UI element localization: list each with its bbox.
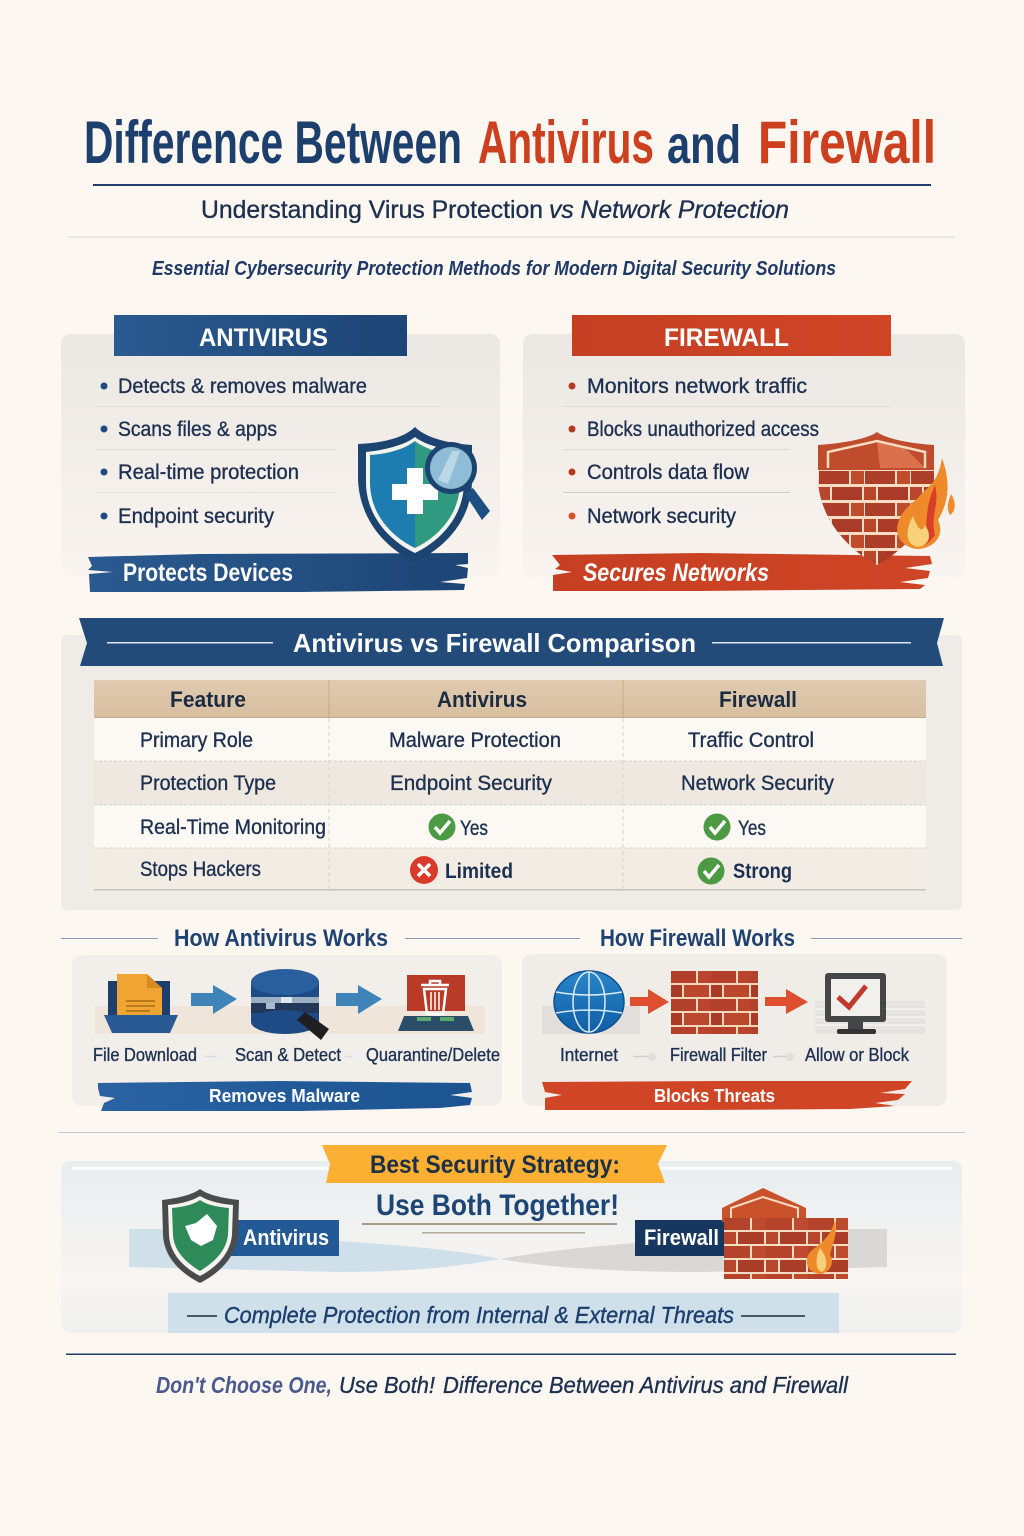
icon: internet globe: [554, 971, 624, 1033]
row: stops hackers: Stops Hackers: [140, 858, 261, 881]
subtitle: [201, 196, 789, 224]
arrow: [336, 985, 382, 1014]
subtitle: Understanding Virus Protection: [201, 196, 543, 224]
firewall feature list: Blocks unauthorized access: [587, 418, 819, 441]
antivirus feature list: [100, 375, 367, 528]
row: primary role: Traffic Control: [688, 729, 814, 752]
yellow ribbon: [322, 1145, 667, 1183]
subtitle: vs Network Protection: [549, 196, 789, 224]
icon: brick wall: [671, 971, 758, 1034]
callout: complete protection: Complete Protection from Internal & External Threats: [224, 1302, 734, 1328]
firewall header: [572, 315, 891, 356]
row: protection type: Protection Type: [140, 772, 276, 795]
row: protection type: [140, 772, 834, 795]
ribbon: protects devices: Protects Devices: [123, 559, 293, 587]
table header row: Firewall: [719, 687, 797, 712]
step labels: Firewall Filter: [670, 1045, 767, 1065]
firewall tag: Firewall: [644, 1225, 719, 1250]
title: Firewall: [758, 109, 936, 176]
ribbon: protects devices: [88, 553, 468, 592]
comparison banner: Antivirus vs Firewall Comparison: [293, 628, 696, 658]
table header row: Feature: [170, 687, 246, 712]
step labels: File Download: [93, 1045, 197, 1065]
icon: firewall shield with flame: [818, 432, 955, 566]
arrow: [765, 989, 808, 1014]
row: protection type: Network Security: [681, 772, 834, 795]
ribbon: removes malware: [98, 1081, 472, 1111]
tagline: Essential Cybersecurity Protection Methods for Modern Digital Security Solutions: [152, 258, 836, 280]
ribbon: secures networks: Secures Networks: [583, 559, 769, 587]
panel: how antivirus works: [72, 955, 502, 1111]
step labels: Quarantine/Delete: [366, 1045, 500, 1065]
row: stops hackers: Limited: [445, 860, 513, 883]
heading: how firewall works: How Firewall Works: [600, 925, 795, 952]
ribbon: blocks threats: Blocks Threats: [654, 1086, 775, 1106]
arrow: [191, 985, 237, 1014]
antivirus feature list: Detects & removes malware: [118, 375, 367, 398]
row: primary role: Malware Protection: [389, 729, 561, 752]
ribbon: removes malware: Removes Malware: [209, 1086, 360, 1106]
title: Antivirus: [478, 109, 654, 176]
row: stops hackers: Strong: [733, 860, 792, 883]
row: real-time monitoring: Yes: [738, 817, 766, 840]
footer tagline: Use Both!: [339, 1372, 436, 1398]
antivirus header: [114, 315, 407, 356]
antivirus header: ANTIVIRUS: [199, 324, 328, 352]
icon: database scanner: [251, 969, 329, 1040]
step labels: Internet: [560, 1045, 618, 1065]
row: primary role: [140, 729, 814, 752]
heading: how antivirus works: How Antivirus Works: [174, 925, 388, 952]
row: stops hackers: [140, 856, 792, 884]
ribbon: secures networks: [552, 553, 932, 591]
antivirus tag: Antivirus: [243, 1225, 329, 1250]
table header row: Antivirus: [437, 687, 527, 712]
icon: file folder: [104, 974, 178, 1033]
icon: antivirus shield with magnifier: [358, 427, 490, 562]
antivirus tag: [225, 1220, 339, 1256]
row: real-time monitoring: Real-Time Monitoring: [140, 816, 326, 839]
step labels: Allow or Block: [805, 1045, 910, 1065]
firewall feature list: Controls data flow: [587, 461, 750, 484]
firewall tag: [635, 1220, 730, 1256]
icon: monitor check: [815, 973, 925, 1034]
firewall feature list: Network security: [587, 505, 736, 528]
firewall feature list: Monitors network traffic: [587, 375, 807, 398]
connecting bands: [129, 1229, 887, 1272]
panel: how firewall works: [522, 954, 947, 1110]
comparison table: [94, 680, 926, 890]
antivirus feature list: Real-time protection: [118, 461, 299, 484]
panel: best security strategy: [61, 1145, 962, 1333]
step labels: [93, 1045, 500, 1065]
row: protection type: Endpoint Security: [390, 772, 552, 795]
icon: green shield: [162, 1189, 239, 1283]
row: primary role: Primary Role: [140, 729, 253, 752]
row: real-time monitoring: Yes: [460, 817, 488, 840]
antivirus feature list: Endpoint security: [118, 505, 274, 528]
firewall header: FIREWALL: [664, 324, 789, 352]
title: Difference Between: [84, 109, 462, 176]
footer tagline: Don't Choose One,: [156, 1372, 332, 1398]
heading: use both together: Use Both Together!: [376, 1189, 619, 1222]
panel: antivirus: [61, 315, 500, 592]
panel: comparison: [61, 618, 962, 910]
panel: firewall: [523, 315, 965, 591]
row: real-time monitoring: [140, 814, 766, 840]
step labels: [560, 1045, 910, 1065]
table header row: [170, 687, 797, 712]
footer tagline: Difference Between Antivirus and Firewall: [443, 1372, 849, 1398]
yellow ribbon: Best Security Strategy:: [370, 1151, 620, 1179]
icon: quarantine trash: [398, 975, 474, 1031]
step labels: Scan & Detect: [235, 1045, 341, 1065]
footer tagline: [156, 1372, 849, 1398]
title: and: [667, 115, 741, 175]
antivirus feature list: Scans files & apps: [118, 418, 277, 441]
arrow: [630, 989, 669, 1014]
ribbon: blocks threats: [542, 1081, 912, 1110]
title: [84, 109, 936, 176]
icon: brick firewall with flame: [722, 1188, 848, 1279]
callout: complete protection: [168, 1293, 839, 1333]
firewall feature list: [568, 375, 819, 528]
comparison banner: [79, 618, 944, 666]
